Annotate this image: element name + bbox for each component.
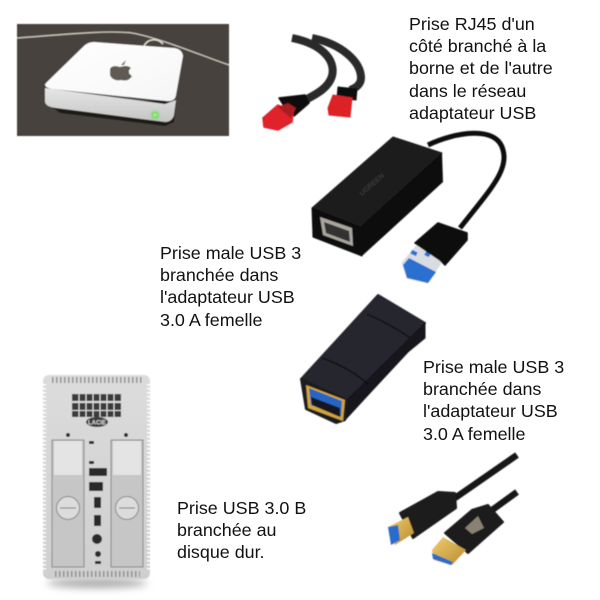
text: RJ45 plug caption: Prise RJ45 d'un — [409, 14, 535, 34]
text: left USB 3 male plug caption: Prise male USB 3 — [160, 243, 301, 263]
photo: RJ45 ethernet cable — [263, 38, 361, 130]
text: left USB 3 male plug caption — [160, 243, 301, 330]
text: RJ45 plug caption: borne et de l'autre — [409, 58, 553, 78]
ventilation grid — [72, 394, 121, 417]
text: USB 3.0 B plug caption — [177, 498, 306, 562]
text: right USB 3 male plug caption: 3.0 A femelle — [423, 424, 525, 444]
text: left USB 3 male plug caption: branchée dans — [160, 265, 278, 285]
text: right USB 3 male plug caption: Prise male USB 3 — [423, 357, 564, 377]
photo: USB 3.0 cable with A and B plugs — [388, 455, 517, 565]
photo: LaCie hard drive rear panel — [43, 375, 150, 588]
text: RJ45 plug caption: côté branché à la — [409, 36, 546, 56]
text: right USB 3 male plug caption — [423, 357, 564, 444]
right drive bay — [111, 440, 143, 567]
text: right USB 3 male plug caption: branchée dans — [423, 379, 541, 399]
LaCie logo — [86, 417, 108, 427]
text: USB 3.0 B plug caption: branchée au — [177, 520, 276, 540]
text: left USB 3 male plug caption: l'adaptateur USB — [160, 287, 295, 307]
text: USB 3.0 B plug caption: disque dur. — [177, 542, 265, 562]
adapter brand label: UGREEN — [359, 173, 386, 198]
connector ports column — [66, 433, 128, 564]
text: left USB 3 male plug caption: 3.0 A femelle — [160, 310, 262, 330]
photo: Time Capsule router — [17, 24, 229, 136]
photo: USB 3.0 A female coupler — [301, 295, 425, 423]
text: right USB 3 male plug caption: l'adaptateur USB — [423, 401, 558, 421]
left drive bay — [52, 440, 84, 567]
text: RJ45 plug caption: dans le réseau — [409, 81, 526, 101]
photo: LaCie hard drive rear panel: LACIE — [88, 420, 106, 426]
text: RJ45 plug caption — [409, 14, 553, 123]
text: USB 3.0 B plug caption: Prise USB 3.0 B — [177, 498, 306, 518]
photo: USB to RJ45 adapter — [312, 133, 504, 283]
text: RJ45 plug caption: adaptateur USB — [409, 103, 536, 123]
